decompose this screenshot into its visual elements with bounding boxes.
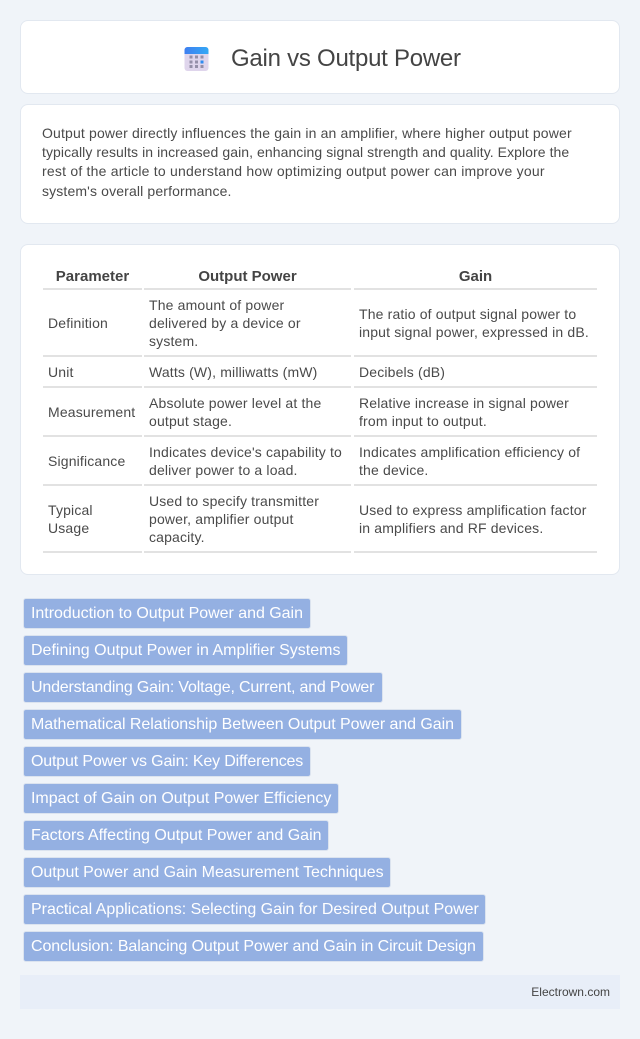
unit gain: Decibels (dB)	[359, 364, 445, 380]
significance output power: Indicates device's capability to	[149, 444, 342, 460]
significance gain: the device.	[359, 462, 428, 478]
footer	[20, 975, 620, 1009]
topic button 2: Defining Output Power in Amplifier Systems	[31, 642, 340, 659]
measurement gain	[359, 395, 569, 429]
topic list	[23, 598, 486, 962]
row: typical usage: Usage	[48, 520, 89, 536]
typical usage gain: Used to express amplification factor	[359, 502, 587, 518]
comparison table	[43, 268, 597, 553]
topic button 7	[23, 820, 329, 851]
panel: header	[20, 20, 620, 94]
row: typical usage	[48, 502, 93, 536]
topic button 10: Conclusion: Balancing Output Power and Gain in Circuit Design	[31, 938, 476, 955]
topic button 9: Practical Applications: Selecting Gain for Desired Output Power	[31, 901, 479, 918]
measurement output power: Absolute power level at the	[149, 395, 321, 411]
definition gain: input signal power, expressed in dB.	[359, 324, 589, 340]
definition output power: delivered by a device or	[149, 315, 301, 331]
topic button 1: Introduction to Output Power and Gain	[31, 605, 303, 622]
summary text: Output power directly influences the gain in an amplifier, where higher output power	[42, 125, 572, 141]
typical usage output power: Used to specify transmitter	[149, 493, 319, 509]
topic button 3	[23, 672, 383, 703]
table header: parameter: Parameter	[56, 268, 129, 285]
significance gain: Indicates amplification efficiency of	[359, 444, 580, 460]
definition output power: system.	[149, 333, 198, 349]
panel: comparison table	[20, 244, 620, 575]
topic button 4: Mathematical Relationship Between Output Power and Gain	[31, 716, 454, 733]
topic button 10	[23, 931, 484, 962]
measurement output power: output stage.	[149, 413, 232, 429]
row: typical usage: Typical	[48, 502, 93, 518]
significance output power: deliver power to a load.	[149, 462, 298, 478]
topic button 8: Output Power and Gain Measurement Techniques	[31, 864, 384, 881]
row: unit: Unit	[48, 364, 74, 380]
topic button 1	[23, 598, 311, 629]
typical usage output power: capacity.	[149, 529, 205, 545]
table header: gain: Gain	[459, 268, 492, 285]
row: measurement: Measurement	[48, 404, 135, 420]
definition output power: The amount of power	[149, 297, 284, 313]
topic button 8	[23, 857, 391, 888]
topic button 3: Understanding Gain: Voltage, Current, and Power	[31, 679, 374, 696]
summary text: system's overall performance.	[42, 183, 232, 199]
summary text: typically results in increased gain, enhancing signal strength and quality. Explore the	[42, 144, 569, 160]
summary text	[42, 125, 572, 199]
footer credit: Electrown.com	[531, 985, 610, 999]
typical usage output power	[149, 493, 319, 545]
definition gain: The ratio of output signal power to	[359, 306, 576, 322]
definition gain	[359, 306, 589, 340]
topic button 5: Output Power vs Gain: Key Differences	[31, 753, 303, 770]
measurement output power	[149, 395, 321, 429]
measurement gain: Relative increase in signal power	[359, 395, 569, 411]
typical usage gain	[359, 502, 587, 536]
topic button 6: Impact of Gain on Output Power Efficiency	[31, 790, 331, 807]
topic button 2	[23, 635, 348, 666]
topic button 9	[23, 894, 486, 925]
row: significance: Significance	[48, 453, 125, 469]
typical usage gain: in amplifiers and RF devices.	[359, 520, 543, 536]
panel: summary	[20, 104, 620, 224]
summary text: rest of the article to understand how optimizing output power can improve your	[42, 163, 545, 179]
measurement gain: from input to output.	[359, 413, 487, 429]
definition output power	[149, 297, 301, 349]
unit output power: Watts (W), milliwatts (mW)	[149, 364, 318, 380]
typical usage output power: power, amplifier output	[149, 511, 294, 527]
topic button 7: Factors Affecting Output Power and Gain	[31, 827, 322, 844]
topic button 6	[23, 783, 339, 814]
topic button 4	[23, 709, 462, 740]
significance gain	[359, 444, 580, 478]
topic button 5	[23, 746, 311, 777]
table header: output power: Output Power	[198, 268, 297, 285]
significance output power	[149, 444, 342, 478]
row: definition: Definition	[48, 315, 108, 331]
title: Gain vs Output Power	[231, 45, 461, 72]
icon: calendar	[184, 47, 208, 71]
